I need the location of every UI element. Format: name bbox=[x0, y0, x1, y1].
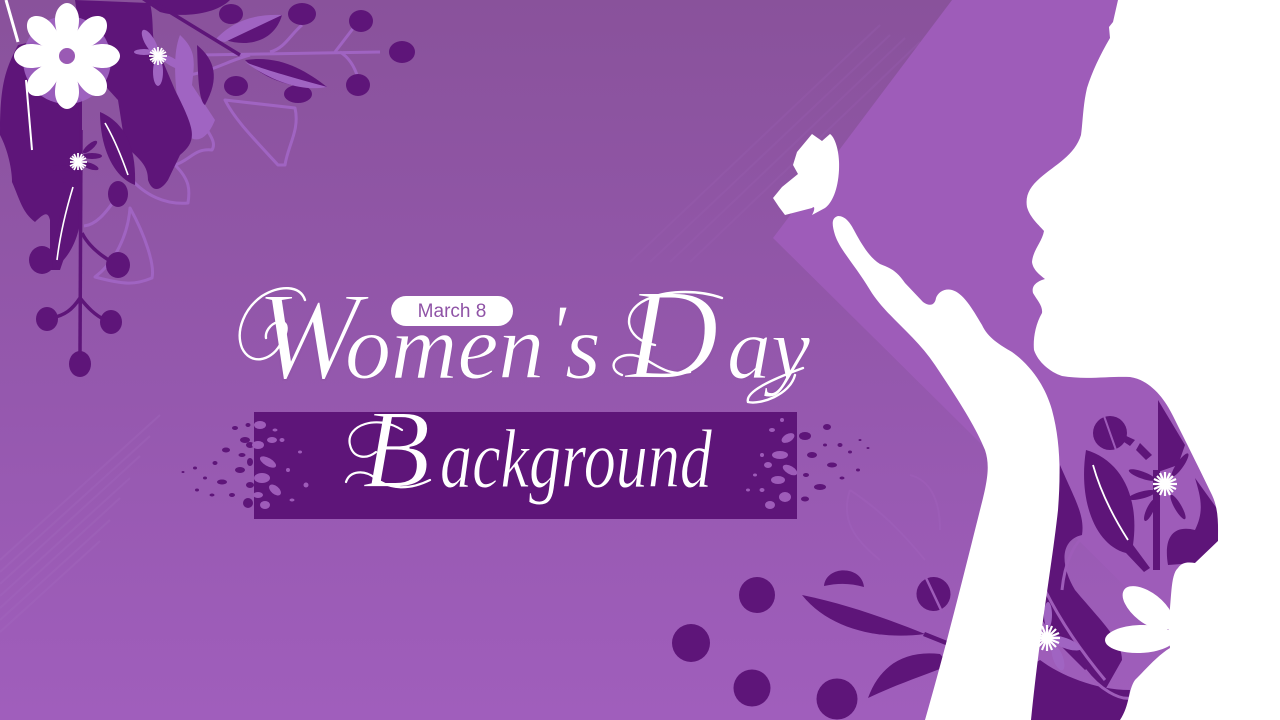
split berry bbox=[916, 577, 951, 611]
diagonal stripes upper centre bbox=[630, 25, 920, 262]
title: Women's Day: omen bbox=[345, 296, 544, 398]
stem bit bbox=[923, 632, 950, 646]
title: Women's Day: ay bbox=[727, 301, 811, 398]
date text: March 8 bbox=[418, 301, 486, 322]
confetti right outside bbox=[799, 424, 870, 502]
confetti right inside bbox=[746, 418, 799, 509]
chest floral pattern bbox=[1030, 400, 1218, 720]
floral cluster top left bbox=[0, 0, 415, 377]
white butterfly bbox=[773, 134, 839, 215]
lower right blob bbox=[1167, 478, 1218, 565]
subtitle text: B bbox=[362, 388, 430, 512]
big leaf bbox=[1084, 450, 1150, 572]
panel: light diamond bbox=[773, 0, 1280, 720]
banner rectangle bbox=[254, 412, 797, 519]
berry 2 bbox=[672, 624, 710, 662]
dark stems bbox=[52, 0, 240, 355]
title: Women's Day: D bbox=[623, 263, 719, 407]
half berry bbox=[824, 570, 864, 587]
berry 1 bbox=[739, 577, 775, 613]
white figure: head and body silhouette bbox=[1027, 0, 1280, 720]
mid purple stems bbox=[190, 22, 380, 78]
berry 4 bbox=[816, 678, 858, 720]
dark berries bbox=[29, 3, 415, 377]
white veins bbox=[6, 0, 128, 260]
berry 3 bbox=[734, 670, 770, 706]
white arm and hand bbox=[833, 216, 1060, 720]
icon: white flower petals bottom right bbox=[1105, 578, 1181, 654]
icon: chest flower lower centre bbox=[1034, 625, 1060, 651]
bud bbox=[1093, 416, 1127, 450]
subtitle text: ackground bbox=[440, 413, 713, 506]
split berry slit bbox=[926, 578, 942, 612]
light purple veins bbox=[1045, 540, 1130, 698]
mid purple leaf halves bbox=[215, 15, 327, 88]
title flourishes bbox=[240, 288, 803, 403]
dashes bbox=[1118, 434, 1152, 460]
outline leaves bbox=[84, 100, 296, 283]
faint leaf outline behind arm bbox=[847, 475, 940, 560]
confetti left outside bbox=[182, 423, 254, 508]
icon: small flower lower bbox=[50, 139, 102, 184]
diagonal stripes lower left bbox=[0, 415, 160, 632]
upper right foliage bbox=[1158, 400, 1185, 472]
title: Women's Day: W bbox=[256, 268, 370, 406]
icon: chest flower lower bbox=[1044, 602, 1083, 672]
confetti left inside bbox=[252, 421, 308, 509]
icon: large white daisy bbox=[14, 3, 120, 109]
bud slit bbox=[1104, 416, 1116, 450]
subtitle flourishes bbox=[346, 422, 430, 487]
title: Women's Day: ' bbox=[549, 290, 568, 378]
icon: small flower upper bbox=[134, 28, 185, 86]
lower foliage one bbox=[1042, 465, 1122, 690]
leaf short bbox=[868, 653, 950, 698]
leaf long bbox=[802, 595, 925, 636]
dark foliage bbox=[0, 0, 327, 270]
mid purple leaf bbox=[175, 35, 215, 139]
lower foliage two bbox=[1030, 660, 1130, 720]
title: Women's Day: s bbox=[565, 296, 601, 398]
icon: chest flower upper bbox=[1128, 452, 1191, 522]
stem bbox=[1153, 470, 1160, 570]
panel: subtitle banner bbox=[182, 388, 870, 519]
text: date pill bbox=[391, 296, 513, 326]
bottom centre berries and leaves bbox=[672, 570, 951, 720]
pill shape bbox=[391, 296, 513, 326]
white vein bbox=[1093, 465, 1128, 540]
